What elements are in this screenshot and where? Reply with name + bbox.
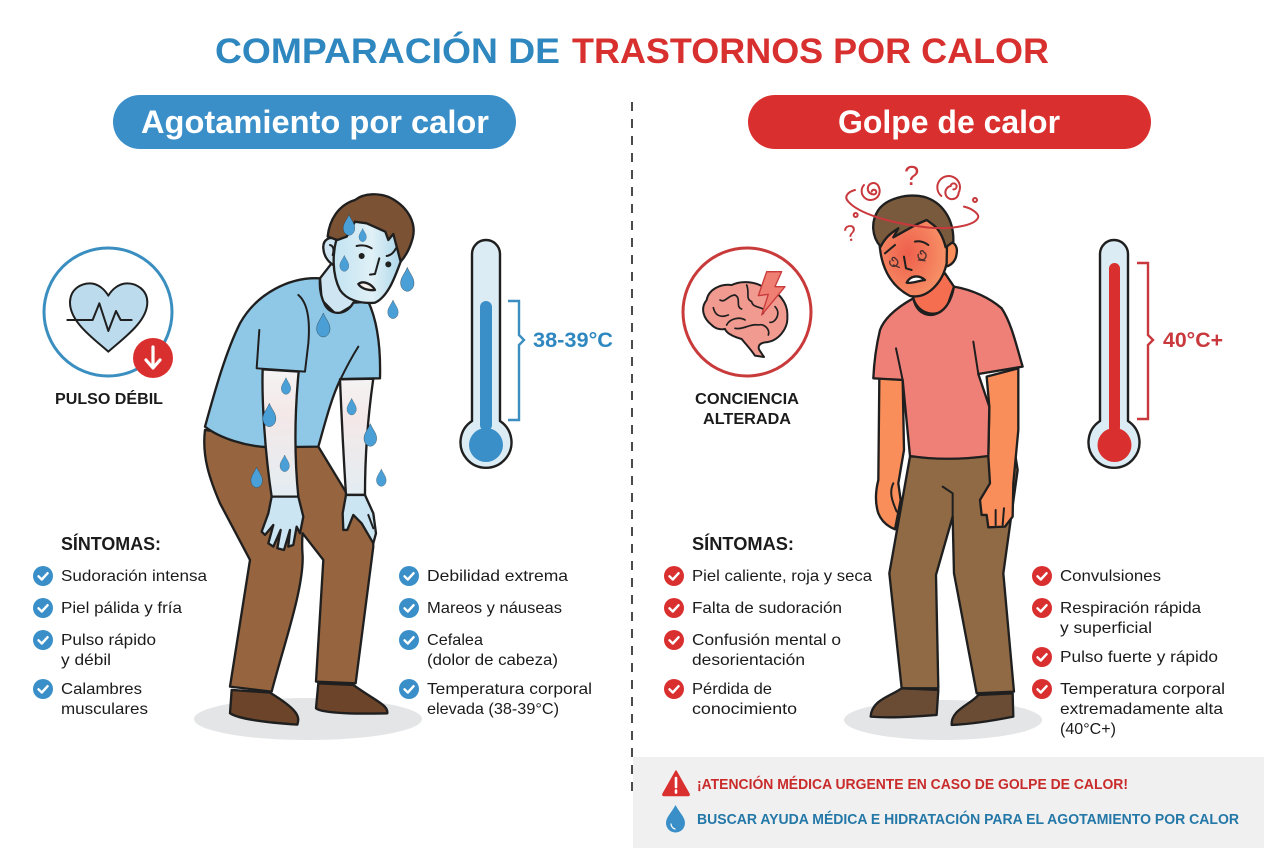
symptoms: agotamiento, left column: y débil (61, 652, 111, 669)
hand left (262, 497, 303, 550)
dizziness swirls: ? (841, 219, 859, 247)
symptoms: agotamiento, left column: Sudoración intensa (61, 568, 207, 585)
symptoms: agotamiento, right column: Temperatura corporal (427, 681, 592, 698)
pants (204, 430, 373, 692)
ground shadow (194, 698, 422, 740)
dizziness swirls: ? (904, 160, 919, 191)
title (215, 31, 1049, 71)
icon: brain with lightning (683, 248, 811, 376)
arm right (340, 379, 373, 495)
symptoms: agotamiento, right column: (dolor de cabeza) (427, 652, 558, 669)
arm left (876, 378, 904, 529)
symptoms: golpe de calor, left column: Falta de sudoración (692, 600, 842, 617)
hair (873, 196, 953, 247)
shoes (230, 683, 387, 725)
hand right (343, 495, 376, 543)
sleeve lines (257, 295, 358, 379)
panel heading: Golpe de calor (748, 95, 1151, 149)
face (890, 251, 926, 267)
symptoms: golpe de calor, right column: Pulso fuerte y rápido (1060, 649, 1218, 666)
icon: warning triangle (663, 771, 689, 796)
symptoms: golpe de calor, left column (664, 533, 872, 718)
thermometer: 40°C+ (1088, 240, 1223, 468)
shoes (871, 688, 1013, 725)
symptoms: agotamiento, left column: musculares (61, 701, 148, 718)
symptoms: golpe de calor, right column: Respiración rápida (1060, 600, 1201, 617)
symptoms: golpe de calor, left column: SÍNTOMAS: (692, 533, 794, 554)
symptoms: agotamiento, left column: Piel pálida y fría (61, 600, 182, 617)
panel heading: Golpe de calor: Golpe de calor (838, 104, 1060, 140)
panel heading: Agotamiento por calor: Agotamiento por calor (141, 104, 489, 140)
ear (323, 238, 337, 267)
head (334, 210, 403, 303)
face (359, 253, 365, 259)
symptoms: golpe de calor, right column: y superficial (1060, 620, 1152, 637)
shirt (205, 278, 380, 447)
symptoms: golpe de calor, left column: Confusión mental o (692, 632, 841, 649)
thermometer: 40°C+: 40°C+ (1163, 329, 1223, 352)
callout: warnings panel (633, 757, 1264, 848)
arm left (262, 369, 299, 497)
title: COMPARACIÓN DE (215, 31, 560, 71)
symptoms: agotamiento, left column (33, 533, 207, 718)
text: urgent attention: ¡ATENCIÓN MÉDICA URGENTE EN CASO DE GOLPE DE CALOR! (697, 775, 1128, 793)
panel heading: Agotamiento por calor (113, 95, 516, 149)
symptoms: golpe de calor, right column: Temperatura corporal (1060, 681, 1225, 698)
text: seek help: BUSCAR AYUDA MÉDICA E HIDRATACIÓN PARA EL AGOTAMIENTO POR CALOR (697, 810, 1240, 828)
figure: heat exhaustion man (194, 194, 422, 740)
ear (944, 242, 957, 267)
symptoms: agotamiento, left column: Calambres (61, 681, 142, 698)
dizziness swirls (841, 160, 978, 247)
symptoms: golpe de calor, left column: Piel caliente, roja y seca (692, 568, 872, 585)
symptoms: agotamiento, right column: Mareos y náuseas (427, 600, 562, 617)
figure: heat stroke man (841, 160, 1042, 740)
arm right (980, 368, 1018, 527)
symptoms: golpe de calor, right column: Convulsiones (1060, 568, 1161, 585)
sweat drops (251, 215, 414, 488)
label: conciencia alterada: CONCIENCIA (695, 391, 799, 408)
symptoms: agotamiento, right column: Cefalea (427, 632, 483, 649)
neck (912, 273, 954, 314)
symptoms: agotamiento, right column: Debilidad extrema (427, 568, 568, 585)
thermometer: 38-39°C (460, 240, 613, 468)
head (879, 210, 947, 296)
symptoms: golpe de calor, right column: (40°C+) (1060, 721, 1116, 738)
symptoms: agotamiento, right column: elevada (38-39°C) (427, 701, 559, 718)
symptoms: golpe de calor, left column: desorientación (692, 652, 805, 669)
icon: weak pulse (44, 248, 173, 378)
symptoms: golpe de calor, right column: extremadamente alta (1060, 701, 1223, 718)
symptoms: golpe de calor, left column: conocimiento (692, 701, 797, 718)
hair (328, 194, 414, 262)
label: conciencia alterada: ALTERADA (703, 411, 791, 428)
symptoms: agotamiento, right column (399, 566, 592, 718)
title: TRASTORNOS POR CALOR (572, 32, 1049, 71)
ground shadow (844, 700, 1042, 740)
icon: water drop (666, 805, 685, 832)
symptoms: agotamiento, left column: SÍNTOMAS: (61, 533, 161, 554)
symptoms: golpe de calor, right column (1032, 566, 1225, 738)
symptoms: golpe de calor, left column: Pérdida de (692, 681, 772, 698)
label: conciencia alterada (695, 391, 799, 428)
pants (889, 453, 1018, 693)
neck (320, 263, 357, 315)
shirt (873, 287, 1023, 459)
label: pulso débil: PULSO DÉBIL (55, 391, 163, 408)
sleeve lines (896, 342, 978, 380)
symptoms: agotamiento, left column: Pulso rápido (61, 632, 156, 649)
thermometer: 38-39°C: 38-39°C (533, 329, 613, 352)
